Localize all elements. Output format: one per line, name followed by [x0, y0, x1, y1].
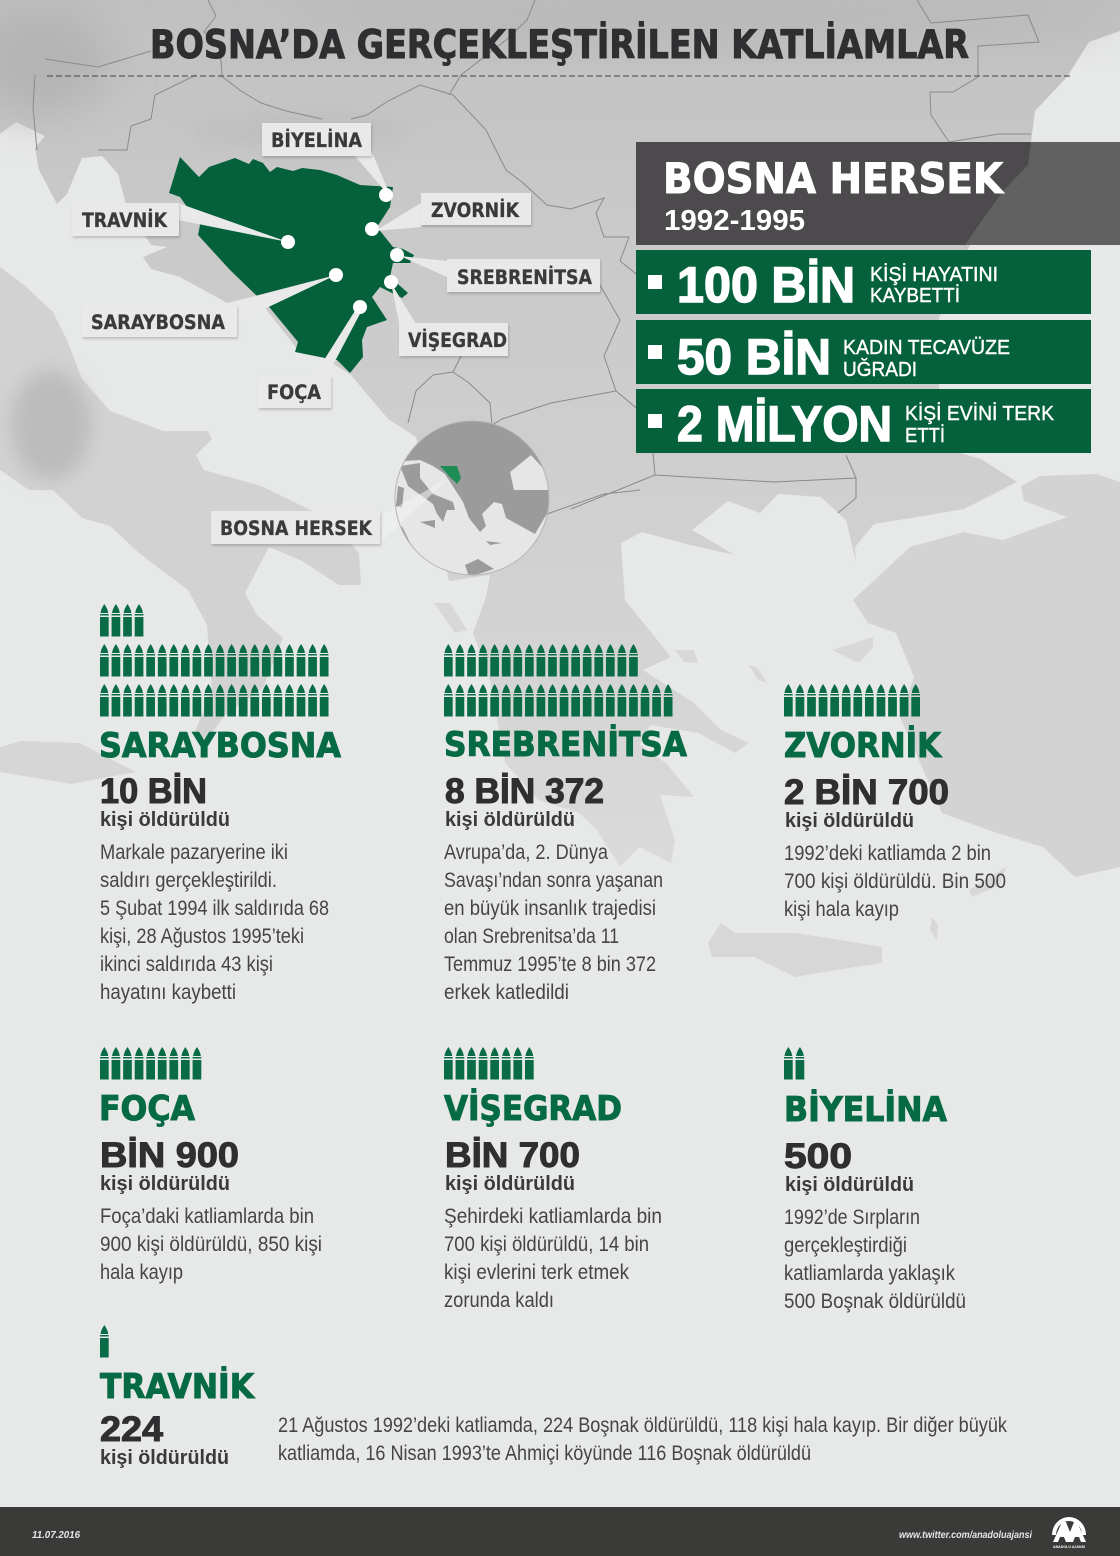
panel: Srebrenitsa: kişi öldürüldü	[445, 809, 575, 831]
description: hala kayıp	[100, 1261, 183, 1284]
description: Şehirdeki katliamlarda bin	[444, 1205, 662, 1228]
panel: Biyelina: kişi öldürüldü	[785, 1174, 914, 1196]
description	[100, 841, 329, 1004]
panel: Srebrenitsa	[444, 644, 688, 1004]
panel: Zvornik: kişi öldürüldü	[785, 810, 914, 832]
stat: 100 bin: KAYBETTİ	[870, 284, 960, 307]
description: erkek katledildi	[444, 981, 569, 1004]
bullet icons	[100, 604, 329, 716]
panel: Biyelina	[784, 1047, 966, 1313]
label: Biyelina: BİYELİNA	[271, 128, 362, 152]
label: Visegrad: VİŞEGRAD	[408, 328, 507, 352]
panel: Zvornik: ZVORNİK	[784, 725, 943, 766]
description: 900 kişi öldürüldü, 850 kişi	[100, 1233, 322, 1256]
stat: 2 milyon	[636, 389, 1091, 453]
label: Biyelina	[262, 123, 371, 156]
bullet icons	[444, 1047, 534, 1080]
description: zorunda kaldı	[444, 1289, 554, 1312]
bullet icons	[444, 644, 673, 716]
description: ikinci saldırıda 43 kişi	[100, 953, 273, 976]
description: gerçekleştirdiği	[784, 1234, 907, 1257]
description: 700 kişi öldürüldü, 14 bin	[444, 1233, 649, 1256]
panel: Visegrad: kişi öldürüldü	[445, 1173, 575, 1195]
description: olan Srebrenitsa’da 11	[444, 925, 619, 948]
label: Bosna Hersek: BOSNA HERSEK	[220, 517, 373, 540]
label: Visegrad	[399, 323, 508, 356]
leader lines	[178, 150, 447, 376]
description: 700 kişi öldürüldü. Bin 500	[784, 870, 1006, 893]
description: kişi evlerini terk etmek	[444, 1261, 629, 1284]
date: 11.07.2016	[32, 1530, 80, 1541]
stat: 2 milyon: KİŞİ EVİNİ TERK	[905, 402, 1055, 425]
description: 21 Ağustos 1992’deki katliamda, 224 Boşnak öldürüldü, 118 kişi hala kayıp. Bir diğer büyük	[278, 1414, 1007, 1437]
label: Foca: FOÇA	[267, 381, 321, 404]
footer	[0, 1507, 1120, 1556]
panel: Travnik: 224	[100, 1410, 164, 1449]
icon: Anadolu Agency logo: ANADOLU AJANSI	[1053, 1544, 1085, 1549]
bullet icons	[100, 1047, 201, 1080]
description	[444, 1205, 662, 1312]
description	[444, 841, 663, 1004]
description: Savaşı’ndan sonra yaşanan	[444, 869, 663, 892]
panel: Srebrenitsa: SREBRENİTSA	[444, 724, 688, 765]
description: saldırı gerçekleştirildi.	[100, 869, 277, 892]
bullet icons	[784, 684, 920, 716]
description: 500 Boşnak öldürüldü	[784, 1290, 966, 1313]
stat: 2 milyon: ETTİ	[905, 424, 945, 447]
description: 5 Şubat 1994 ilk saldırıda 68	[100, 897, 329, 920]
panel: Foca: FOÇA	[99, 1089, 196, 1129]
stat: 2 milyon: 2 MİLYON	[677, 396, 892, 452]
panel: Zvornik: 2 BİN 700	[784, 773, 949, 812]
icon: Anadolu Agency logo	[1052, 1517, 1086, 1549]
label: Srebrenitsa: SREBRENİTSA	[457, 265, 592, 289]
label: Saraybosna: SARAYBOSNA	[91, 311, 225, 334]
description	[784, 1206, 966, 1313]
source link: www.twitter.com/anadoluajansi	[899, 1530, 1032, 1541]
label: Srebrenitsa	[447, 259, 600, 292]
description: en büyük insanlık trajedisi	[444, 897, 656, 920]
label: Saraybosna	[82, 305, 237, 337]
panel: Zvornik	[784, 684, 1006, 921]
bullet icon	[100, 1325, 109, 1358]
panel: Srebrenitsa: 8 BİN 372	[445, 772, 604, 811]
panel: Saraybosna: 10 BİN	[100, 772, 207, 811]
stat: 100 bin: KİŞİ HAYATINI	[870, 263, 998, 286]
title: BOSNA’DA GERÇEKLEŞTİRİLEN KATLİAMLAR	[150, 21, 969, 68]
panel: Travnik	[100, 1325, 1007, 1469]
panel: Foca	[99, 1047, 322, 1284]
stat: 50 bin: UĞRADI	[843, 358, 917, 381]
panel: Visegrad	[444, 1047, 662, 1312]
panel: Biyelina: 500	[784, 1137, 852, 1176]
panel: Saraybosna	[99, 604, 342, 1004]
label: Bosna Hersek	[211, 511, 380, 544]
stat: 50 bin: KADIN TECAVÜZE	[843, 337, 1010, 359]
stat: 100 bin	[636, 250, 1091, 314]
label: Travnik: TRAVNİK	[82, 208, 168, 232]
panel: Foca: BİN 900	[100, 1136, 239, 1175]
description: katliamda, 16 Nisan 1993’te Ahmiçi köyünde 116 Boşnak öldürüldü	[278, 1442, 811, 1465]
stat: 50 bin	[636, 320, 1091, 385]
description: Temmuz 1995’te 8 bin 372	[444, 953, 656, 976]
description: Avrupa’da, 2. Dünya	[444, 841, 608, 864]
stat: 50 bin: 50 BİN	[677, 329, 831, 385]
panel: Travnik: kişi öldürüldü	[100, 1447, 229, 1469]
label: Zvornik: ZVORNİK	[431, 198, 520, 222]
bullet icons	[784, 1047, 804, 1080]
stat: 100 bin: 100 BİN	[677, 257, 855, 313]
panel: Saraybosna: kişi öldürüldü	[100, 809, 230, 831]
description: kişi, 28 Ağustos 1995’teki	[100, 925, 304, 948]
city dots	[281, 188, 404, 314]
panel: Visegrad: BİN 700	[445, 1136, 580, 1175]
description: kişi hala kayıp	[784, 898, 899, 921]
inset highlight: Bosnia	[440, 466, 461, 484]
panel header: BOSNA HERSEK	[663, 154, 1004, 203]
label: Zvornik	[421, 193, 531, 225]
description	[278, 1414, 1007, 1465]
description: hayatını kaybetti	[100, 981, 236, 1004]
country shape	[169, 157, 414, 373]
panel: Bosna Hersek summary	[636, 142, 1120, 453]
panel header	[636, 142, 1120, 245]
inset globe locator	[394, 420, 550, 576]
description: 1992’deki katliamda 2 bin	[784, 842, 991, 865]
description: Foça’daki katliamlarda bin	[100, 1205, 314, 1228]
panel: Foca: kişi öldürüldü	[100, 1173, 230, 1195]
panel header: 1992-1995	[664, 205, 805, 237]
panel: Saraybosna: SARAYBOSNA	[99, 726, 342, 766]
label: Travnik	[72, 203, 179, 236]
description: 1992’de Sırpların	[784, 1206, 920, 1229]
description: Markale pazaryerine iki	[100, 841, 288, 864]
description	[100, 1205, 322, 1284]
panel: Biyelina: BİYELİNA	[784, 1089, 948, 1130]
description	[784, 842, 1006, 921]
panel: Visegrad: VİŞEGRAD	[444, 1088, 622, 1129]
map: Bosnia and Herzegovina	[72, 123, 600, 408]
label: Foca	[258, 376, 331, 408]
panel: Travnik: TRAVNİK	[100, 1366, 256, 1407]
description: katliamlarda yaklaşık	[784, 1262, 955, 1285]
